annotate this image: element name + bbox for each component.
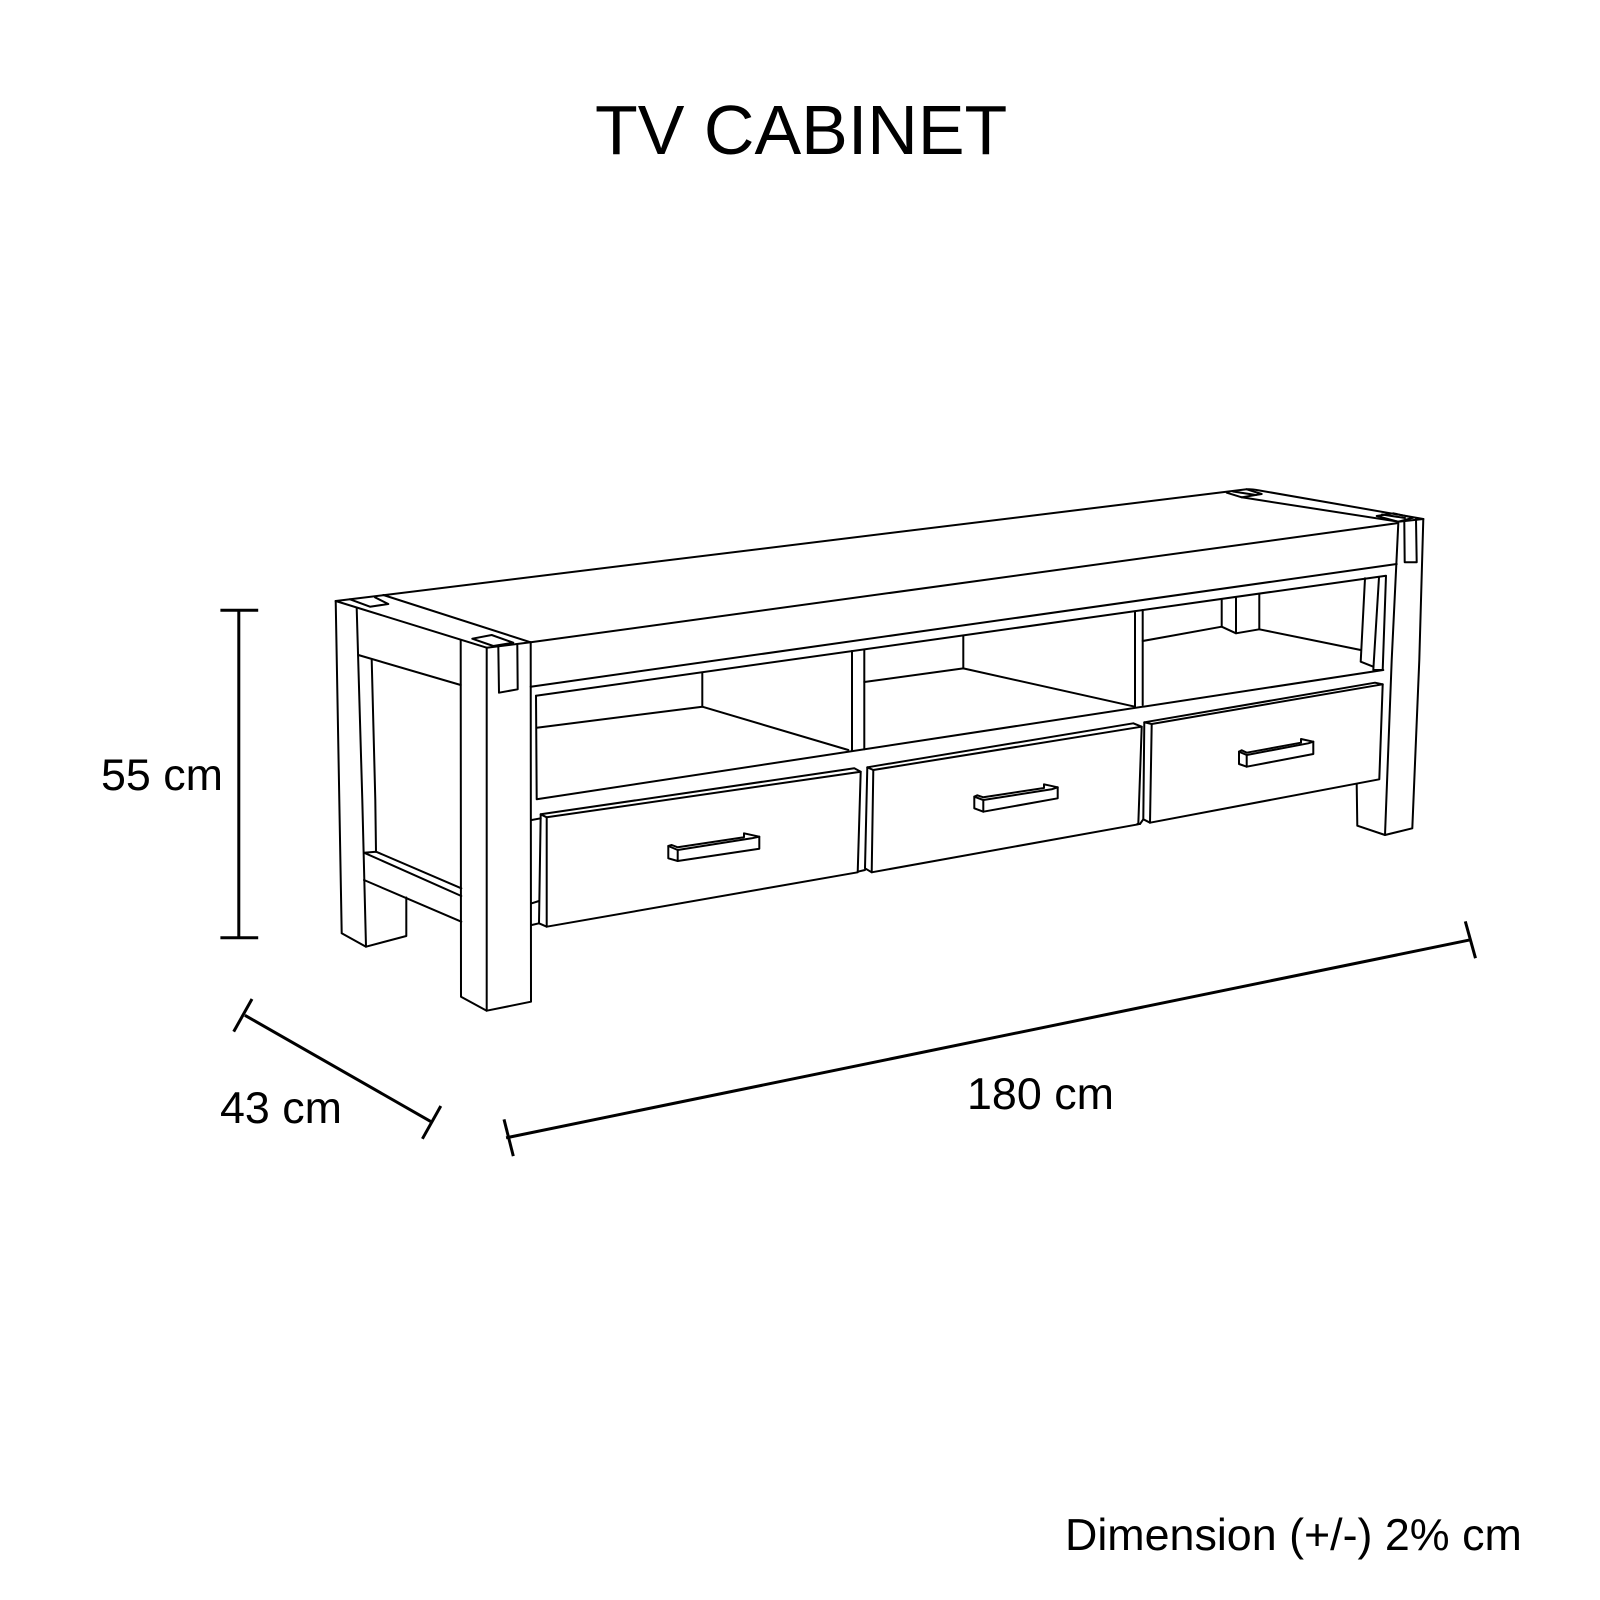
drawer 2 handle [974,784,1058,812]
height label: 55 cm [101,750,223,800]
top notches [350,597,388,607]
height dimension line [220,610,258,938]
title: TV CABINET [595,91,1007,169]
shelf compartment 3 [1143,577,1383,670]
width label: 180 cm [967,1069,1114,1119]
shelf compartment 1 [537,650,864,751]
shelf compartment 2 [864,610,1143,707]
drawer 2 [858,723,1142,872]
left side frame [336,601,461,947]
width dimension line [504,921,1476,1156]
drawer 3 handle [1239,739,1313,767]
right leg [1357,519,1423,835]
TV cabinet line drawing [336,489,1423,1011]
depth label: 43 cm [220,1083,342,1133]
drawer 3 [1137,683,1383,824]
cabinet top surface [336,489,1423,648]
front left leg [461,640,531,1011]
drawer 1 handle [668,833,759,861]
top rail and shelf opening [531,564,1397,799]
depth dimension line [234,999,441,1139]
tolerance note: Dimension (+/-) 2% cm [1065,1510,1522,1560]
drawer 1 [532,768,861,927]
